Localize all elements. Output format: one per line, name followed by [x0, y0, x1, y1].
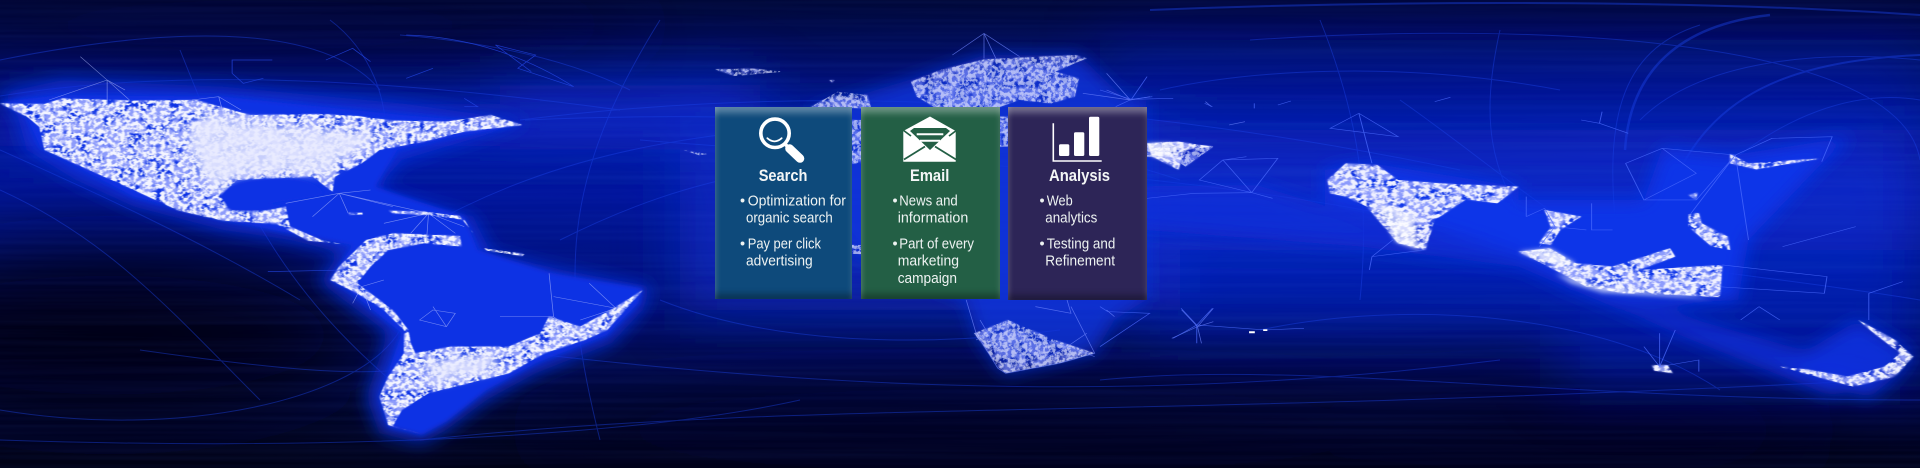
text block: email bullets: marketing	[898, 254, 959, 270]
icon: magnifying glass	[761, 119, 800, 158]
panel: Search	[715, 107, 852, 299]
Europe and Africa haze	[683, 55, 1213, 373]
text block: analysis bullets: •	[1040, 194, 1045, 210]
text block: search bullets: advertising	[746, 254, 813, 270]
Asia hubs and routes	[1100, 77, 1903, 372]
text block: email bullets: •	[892, 194, 898, 210]
Americas dense zone	[187, 115, 500, 383]
Indian Ocean islands	[1249, 329, 1267, 333]
text block: email bullets: •	[892, 237, 898, 253]
glow bands	[0, 40, 1920, 385]
text block: email bullets: News and	[899, 194, 958, 210]
continent: Asia and Oceania	[1147, 142, 1913, 387]
heading: Email: Email	[910, 167, 949, 185]
Asia lavender haze	[1147, 142, 1913, 387]
text block: analysis bullets: Web	[1047, 194, 1073, 210]
panel: Email	[861, 107, 1000, 299]
Africa routes	[952, 33, 1245, 373]
text block: search bullets: Optimization for	[748, 194, 846, 210]
heading: Analysis: Analysis	[1049, 167, 1110, 185]
text block: analysis bullets: •	[1040, 237, 1045, 253]
Europe and Africa blue glow	[810, 55, 1146, 375]
text block: analysis bullets	[1040, 194, 1115, 270]
Americas blue fill	[0, 95, 643, 435]
text block: search bullets: Pay per click	[748, 237, 822, 253]
Asia city mesh	[1147, 142, 1913, 387]
continent: Europe and Africa	[683, 33, 1245, 373]
Americas hubs and routes	[49, 57, 616, 337]
text block: analysis bullets: Refinement	[1045, 254, 1115, 270]
text block: search bullets: •	[740, 237, 745, 253]
panel: Analysis	[1008, 107, 1147, 300]
heading: Search: Search	[759, 167, 807, 185]
text block: search bullets	[740, 194, 846, 270]
text block: search bullets: •	[740, 194, 745, 210]
text block: analysis bullets: Testing and	[1047, 237, 1115, 253]
text block: email bullets	[892, 194, 975, 287]
continent: Americas	[0, 98, 643, 434]
Asia dense coasts	[1147, 143, 1712, 299]
text block: email bullets: information	[898, 211, 968, 227]
icon: open envelope	[903, 116, 957, 162]
Americas blue glow	[0, 80, 652, 443]
icon: bar chart	[1053, 117, 1102, 161]
text block: analysis bullets: analytics	[1045, 211, 1097, 227]
text block: search bullets: organic search	[746, 211, 833, 227]
Arctic outlines	[232, 35, 574, 272]
text block: email bullets: Part of every	[899, 237, 975, 253]
Americas lavender haze	[0, 98, 643, 434]
Europe and Africa mesh	[683, 55, 1213, 373]
Americas city mesh	[0, 98, 643, 434]
Gulf of Mexico	[221, 178, 324, 211]
text block: email bullets: campaign	[898, 271, 957, 287]
bright blue seas of Asia	[1100, 137, 1913, 398]
